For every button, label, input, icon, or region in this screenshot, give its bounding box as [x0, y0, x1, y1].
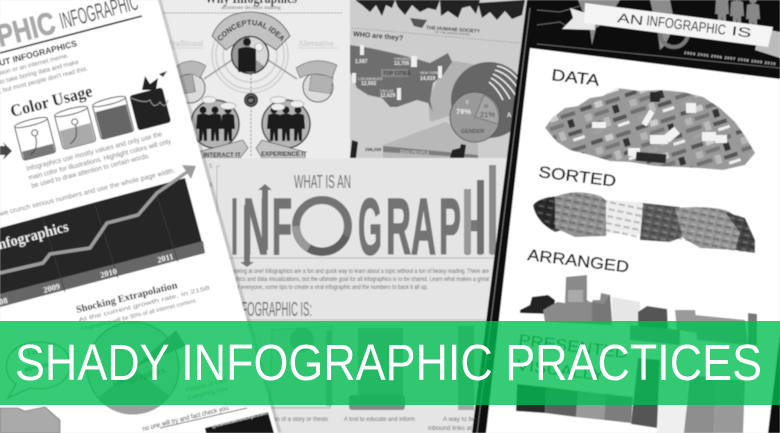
subheading: accelerate decision making: accelerate decision making	[221, 5, 281, 11]
intro paragraph: aphics and data visualizations, but the ultimate goal for all infographics is to be shared. Learn what makes a great	[231, 276, 489, 283]
arrow: N down	[240, 205, 254, 267]
icon: tool	[349, 328, 405, 410]
map: united states: 12,629	[380, 93, 396, 99]
axis ticks: 4	[209, 183, 213, 189]
banner: interact it	[198, 140, 248, 159]
intro paragraph: l for everyone, some tips to create a viral infographic and the numbers to back it all up.	[231, 284, 428, 291]
dark animal silhouettes	[355, 0, 525, 20]
icon: paint bucket 2	[54, 104, 96, 150]
header people icons	[715, 0, 760, 31]
chart: age and gender circles: 21%	[480, 110, 495, 119]
heading: shocking extrapolation: Shocking Extrapolation	[75, 280, 179, 316]
letter O donut	[296, 200, 348, 252]
banner: green strip	[0, 321, 780, 405]
bricks: sorted piles	[533, 192, 755, 253]
chart: age and gender circles: GENDER	[461, 129, 485, 135]
ribbon banner: an infographic is	[562, 3, 780, 58]
intro text: to take boring data and make	[0, 59, 80, 86]
map: united states: NEW YORK	[420, 71, 440, 75]
bricks: arranged skyline	[520, 275, 757, 345]
heading: what is an: WHAT IS AN	[294, 172, 351, 192]
ribbon banner: an infographic is: INFOGRAPHIC	[646, 12, 727, 38]
label: arranged: ARRANGED	[527, 247, 630, 276]
screen	[486, 48, 780, 433]
connector lines	[204, 60, 297, 158]
chart: age and gender circles: M	[484, 104, 488, 110]
map: united states: 12,502	[361, 81, 377, 87]
chart: pie: Infographics	[111, 365, 167, 389]
chart: age and gender circles: F	[466, 100, 469, 106]
map: united states: CHICAGO	[394, 57, 411, 61]
icon: paint bucket 3	[92, 94, 134, 140]
text: extrapolation: Infographics will be 90% of all internet content.	[80, 298, 198, 333]
heading: graphic infographic	[0, 0, 141, 54]
speech bubble	[7, 342, 70, 398]
intro text	[0, 52, 89, 95]
icon: paint bucket 4 overflowing	[129, 71, 171, 131]
panel: what is an infographic: I	[489, 182, 496, 271]
label: presented visually	[516, 332, 629, 385]
big word: infographic: P	[439, 182, 461, 271]
panel: left white sheet	[0, 0, 278, 433]
banner: interact it: INTERACT IT	[203, 153, 241, 159]
icon: book	[270, 326, 332, 408]
caption: story: ion of a story or thesis	[272, 416, 328, 423]
icon: dog	[450, 144, 466, 158]
line: growth arrow	[0, 170, 190, 273]
chart: pie: Everything Else	[187, 386, 230, 402]
header map	[578, 0, 688, 50]
intro text: sion or an internet meme.	[0, 52, 70, 77]
label: presented visually: PRESENTED	[518, 332, 629, 362]
text: crunch numbers: we crunch serious numbers and use the whole page width.	[0, 167, 176, 218]
label: alternative: Alternative	[298, 39, 334, 48]
bar: dog people: DOG PEOPLE	[400, 149, 430, 156]
banner: experience it: EXPERIENCE IT	[261, 152, 307, 158]
speech bubble: obvious,"	[23, 358, 55, 374]
text: extrapolation: At the current growth rate, in 2158	[78, 285, 210, 324]
text: color usage paragraph: Infographics use mostly values and only use the	[26, 131, 163, 173]
label: traditional: Traditional	[168, 39, 204, 48]
big word: infographic: H	[464, 182, 484, 271]
bricks: data pile	[545, 88, 755, 170]
panel: what is an infographic: INFOGRAPHIC IS:	[232, 299, 312, 321]
map: united states: 13,705	[394, 61, 410, 67]
chart: age and gender circles: A	[507, 113, 512, 119]
funnel shapes	[428, 60, 485, 122]
text: extrapolation	[78, 285, 210, 333]
big word: infographic: I	[231, 182, 238, 271]
chart: growth: 2011	[156, 251, 175, 265]
icon: concentric rings	[212, 17, 288, 93]
chart: pie: Pictures of Cats	[185, 378, 228, 394]
panel: what is an infographic	[200, 158, 510, 433]
big word: infographic: G	[358, 182, 382, 271]
bars: presented chart	[516, 358, 745, 433]
logo: humane society	[410, 18, 481, 36]
label: sorted: SORTED	[538, 164, 617, 190]
label: data: DATA	[551, 67, 601, 90]
intro text: , but most people don't read this.	[0, 65, 89, 95]
caption: educate: A tool to educate and inform	[344, 416, 415, 423]
chart: age and gender circles: 79%	[456, 107, 471, 116]
big word: infographic	[231, 182, 496, 271]
audience circle: experience	[262, 96, 310, 148]
chart: age and gender circles	[450, 62, 527, 142]
axis ticks: 5	[209, 164, 213, 170]
logo: humane society: THE HUMANE SOCIETY	[426, 25, 481, 35]
heading: color usage: Color Usage	[8, 81, 95, 121]
big word: infographic: F	[272, 182, 292, 271]
circle: illustrated	[296, 61, 337, 102]
chart: pie	[87, 322, 230, 414]
audience circle: interact	[191, 96, 239, 148]
big word: infographic: A	[411, 182, 436, 271]
chart: growth	[0, 165, 205, 307]
axis line	[228, 257, 500, 259]
logo: humane society: OF THE UNITED STATES	[435, 30, 470, 36]
ribbon banner: an infographic is: AN	[617, 10, 644, 28]
chart: growth: 2010	[99, 266, 118, 280]
banner: conceptual idea	[211, 11, 291, 51]
ribbon banner: an infographic is: IS	[731, 23, 753, 40]
map: united states	[350, 45, 452, 112]
big word: infographic: R	[386, 182, 411, 271]
illustration: grey figure	[0, 407, 60, 433]
icon: thinker in circle	[232, 36, 268, 74]
header chart lines	[537, 6, 780, 68]
map: united states: LOS ANGELES	[358, 77, 383, 81]
caption: inbound links	[428, 416, 476, 432]
label: presented visually: VISUALLY	[516, 357, 605, 385]
panel: lego tablet frame	[472, 0, 780, 433]
circle: written	[174, 61, 206, 103]
icon: link	[458, 326, 474, 410]
text: color usage paragraph: main color for illustrations. Highlight colors will only	[28, 138, 172, 182]
heading: about infographics: UT INFOGRAPHICS	[0, 38, 78, 68]
badge: or	[244, 93, 258, 107]
caption: inbound links: A way to bu	[443, 416, 476, 423]
heading: who are they: WHO are they?	[353, 31, 403, 42]
chart: growth: 2009	[42, 281, 61, 295]
panel: why infographics	[160, 0, 351, 159]
banner: experience it	[256, 140, 307, 158]
icon: paint bucket 1	[14, 115, 56, 161]
header years: 2004 2005 2006 2007 2008 2009 2010	[684, 50, 777, 66]
tag: comical concept: @comicalconcept.com	[211, 410, 269, 430]
map: united states: 14,019	[420, 76, 436, 82]
intro paragraph: looking at one! Infographics are a fun and quick way to learn about a topic without a ton of heavy reading. There are	[231, 268, 489, 275]
panel: humane society	[350, 0, 530, 158]
map: united states: DALLAS	[380, 89, 394, 93]
speech bubble: I can	[26, 345, 45, 358]
banner: conceptual idea: CONCEPTUAL IDEA	[217, 19, 284, 42]
bar: dog people: 299,299	[365, 147, 382, 152]
icon: arrow	[0, 142, 12, 160]
label: top cities: TOP CITIES	[383, 71, 411, 77]
intro paragraph	[231, 268, 489, 291]
arrow: N up	[258, 184, 272, 250]
badge: or: or	[249, 98, 254, 104]
big word: infographic: N	[243, 182, 269, 271]
chart bars on H and I	[464, 165, 496, 254]
text: fact check: no one will try and fact check you.	[142, 404, 231, 433]
caption: inbound links: inbound links at	[428, 425, 472, 432]
map: united states: 1,587	[355, 59, 368, 65]
text: color usage paragraph: be used to draw attention to certain words.	[31, 153, 151, 190]
bar: dog people	[365, 146, 478, 158]
axis ticks	[209, 164, 213, 189]
